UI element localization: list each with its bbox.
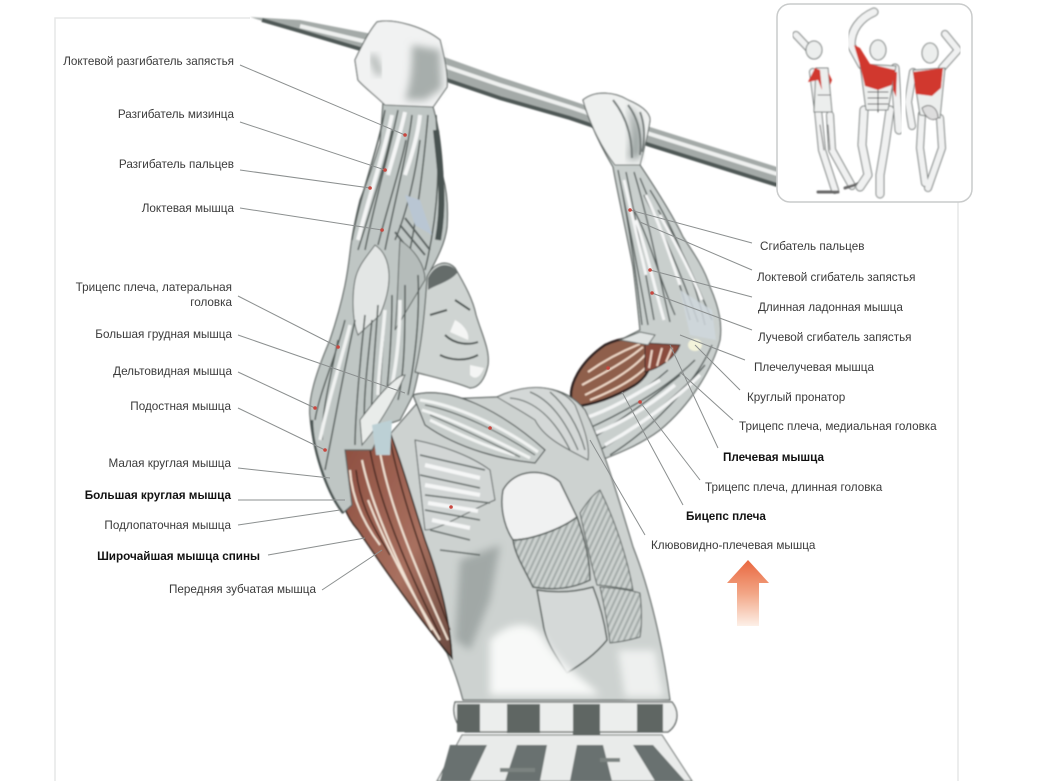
left labels: Локтевая мышца xyxy=(142,202,234,215)
shorts xyxy=(437,702,692,781)
left labels: Широчайшая мышца спины xyxy=(97,550,260,563)
inset panel: three figures xyxy=(777,4,972,202)
deltoid right xyxy=(497,388,588,460)
right labels: Трицепс плеча, медиальная головка xyxy=(739,420,937,433)
right labels: Плечевая мышца xyxy=(723,451,824,464)
right labels: Локтевой сгибатель запястья xyxy=(757,271,915,284)
muscular figure illustration xyxy=(310,21,721,781)
brachialis xyxy=(645,343,680,372)
pectoral band xyxy=(413,393,545,463)
left labels: Малая круглая мышца xyxy=(108,457,231,470)
right labels: Круглый пронатор xyxy=(747,391,846,404)
figure right xyxy=(908,34,958,188)
head xyxy=(415,263,488,388)
left labels: Дельтовидная мышца xyxy=(113,365,232,378)
arrow xyxy=(727,560,769,626)
left labels: Подостная мышца xyxy=(130,400,231,413)
hand xyxy=(355,21,447,107)
left labels: Локтевой разгибатель запястья xyxy=(63,55,234,68)
right labels: Длинная ладонная мышца xyxy=(758,301,903,314)
forearm strands xyxy=(352,110,438,270)
right labels: Трицепс плеча, длинная головка xyxy=(705,481,883,494)
left labels: Подлопаточная мышца xyxy=(104,519,231,532)
left labels xyxy=(63,55,316,596)
torso xyxy=(385,388,670,700)
left labels: Трицепс плеча, латеральная xyxy=(76,281,232,294)
left labels: головка xyxy=(190,296,232,309)
latissimus red muscle xyxy=(340,420,452,658)
elbow twist and upper arm strands xyxy=(353,245,389,335)
biceps red muscle xyxy=(571,339,651,407)
forearm strands xyxy=(618,170,712,325)
elbow bone xyxy=(688,339,702,351)
abdominals xyxy=(502,472,577,540)
red target dots xyxy=(315,135,652,507)
figure center xyxy=(851,12,899,194)
figure left xyxy=(796,35,858,192)
hand xyxy=(583,93,650,165)
pull-up bar xyxy=(250,17,777,187)
serratus xyxy=(415,440,495,530)
left labels: Большая грудная мышца xyxy=(95,328,232,341)
right labels xyxy=(651,240,937,552)
left labels: Разгибатель мизинца xyxy=(118,108,234,121)
right labels: Сгибатель пальцев xyxy=(760,240,864,253)
right labels: Лучевой сгибатель запястья xyxy=(758,331,912,344)
right labels: Бицепс плеча xyxy=(686,510,766,523)
right arm xyxy=(571,93,721,463)
left labels: Разгибатель пальцев xyxy=(119,158,234,171)
right labels: Клювовидно-плечевая мышца xyxy=(651,539,816,552)
right labels: Плечелучевая мышца xyxy=(754,361,874,374)
triceps strands xyxy=(580,345,712,455)
left arm xyxy=(310,21,448,513)
leader lines xyxy=(238,65,752,590)
left labels: Большая круглая мышца xyxy=(85,489,231,502)
left labels: Передняя зубчатая мышца xyxy=(169,583,316,596)
